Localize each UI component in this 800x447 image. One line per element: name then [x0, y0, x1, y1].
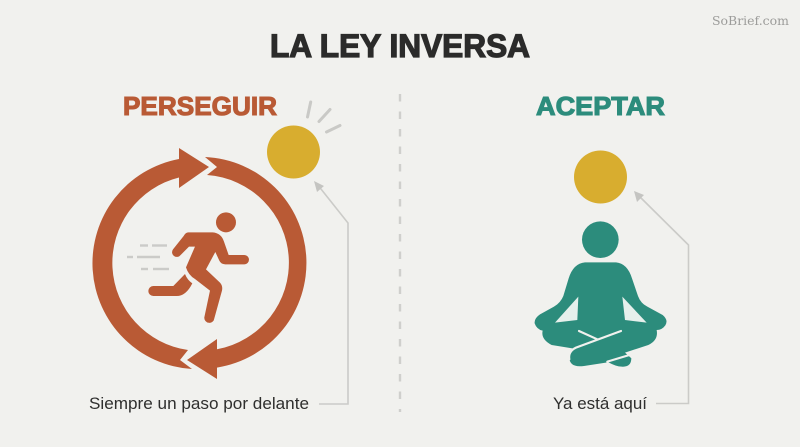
icon: sun rays	[308, 102, 340, 132]
speed lines	[127, 246, 169, 269]
watermark: SoBrief.com	[712, 13, 789, 28]
icon: sun left	[267, 126, 320, 178]
icon: sun right	[574, 150, 627, 204]
arrow: left callout	[314, 181, 348, 404]
label: ya esta aqui: Ya está aquí	[553, 394, 647, 413]
left arrow arc	[92, 148, 209, 369]
arrow: right callout	[634, 191, 688, 404]
title: LA LEY INVERSA	[270, 28, 530, 64]
icon: meditating person	[535, 221, 667, 367]
heading: perseguir: PERSEGUIR	[123, 91, 277, 121]
heading: aceptar: ACEPTAR	[536, 91, 665, 121]
label: siempre: Siempre un paso por delante	[89, 394, 309, 413]
icon: runner	[148, 212, 249, 323]
icon: cycle arrows	[92, 148, 306, 379]
right arrow arc	[187, 157, 306, 379]
